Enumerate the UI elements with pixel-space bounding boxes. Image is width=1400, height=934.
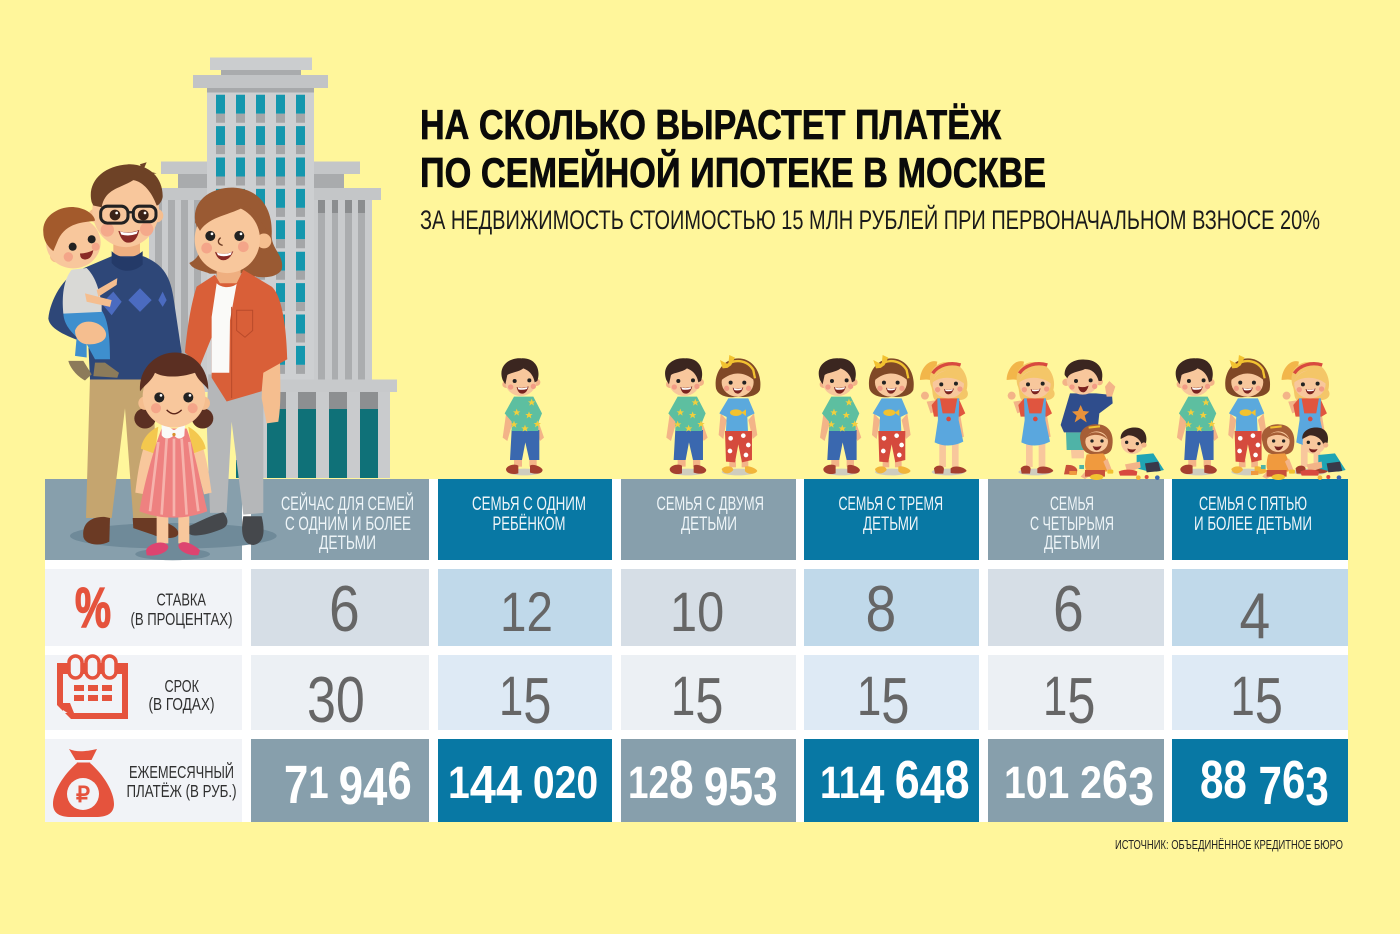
cell payment 128 953: 128 <box>628 750 694 810</box>
illustration: two children <box>665 355 760 475</box>
header: one child: РЕБЁНКОМ <box>492 514 566 535</box>
illustration: four children <box>1007 359 1164 480</box>
row: term <box>45 655 1348 737</box>
cell payment 71 946 <box>251 739 429 822</box>
cell payment 101 263 <box>988 739 1164 822</box>
small boy in arms <box>43 207 119 381</box>
cell term 15: 5 <box>881 665 909 737</box>
header: empty corner <box>45 479 242 560</box>
cell term 15: 1 <box>499 665 523 727</box>
row: rate <box>45 569 1348 652</box>
illustration: one child <box>501 358 544 475</box>
cell payment 114 648: 4 <box>859 754 885 815</box>
cell rate 12: 12 <box>500 581 553 644</box>
woman <box>185 188 287 545</box>
cell payment 71 946: 9 <box>339 757 363 816</box>
header: one child <box>438 479 612 560</box>
row label: term: (В ГОДАХ) <box>148 694 214 714</box>
cell rate 12 <box>438 569 612 646</box>
cell term 15 <box>804 655 979 737</box>
cell payment 144 020: 44 <box>470 754 522 815</box>
cell payment 114 648: 11 <box>820 758 859 808</box>
cell term 15 <box>988 655 1164 737</box>
header: five or more children <box>1172 479 1348 560</box>
illustration: five or more children <box>1176 355 1346 480</box>
icon: building <box>140 58 397 478</box>
row label: term: СРОК <box>164 676 200 696</box>
cell term 15: 1 <box>1043 665 1067 727</box>
man <box>48 162 182 544</box>
cell term 15: 5 <box>695 665 723 737</box>
header: current families: С ОДНИМ И БОЛЕЕ <box>285 514 411 535</box>
header: three children: ДЕТЬМИ <box>863 514 918 535</box>
cell term 15: 1 <box>857 665 881 727</box>
row label: rate: (В ПРОЦЕНТАХ) <box>130 609 232 629</box>
little girl <box>134 352 213 556</box>
cell payment 144 020: 020 <box>522 757 598 808</box>
cell term 30: 30 <box>307 665 365 736</box>
cell payment 101 263: 101 26 <box>1004 749 1128 810</box>
cell term 15: 1 <box>1230 665 1255 727</box>
title: НА СКОЛЬКО ВЫРАСТЕТ ПЛАТЁЖ <box>420 101 1001 148</box>
cell payment 144 020: 1 <box>448 757 470 808</box>
cell rate 6: 6 <box>329 572 360 645</box>
cell payment 71 946: 7 <box>284 756 308 815</box>
cell payment 71 946: 6 <box>387 752 412 811</box>
cell payment 128 953: 953 <box>704 757 778 817</box>
cell payment 114 648 <box>804 739 979 822</box>
cell payment 88 763 <box>1172 739 1348 822</box>
row label: rate: СТАВКА <box>156 590 206 610</box>
cell payment 71 946: 1 <box>308 757 339 808</box>
header: two children <box>621 479 796 560</box>
header: two children: СЕМЬЯ С ДВУМЯ <box>656 494 764 515</box>
cell term 15 <box>621 655 796 737</box>
cell rate 6: 6 <box>1053 572 1084 645</box>
cell rate 8: 8 <box>866 572 896 645</box>
header: three children: СЕМЬЯ С ТРЕМЯ <box>838 494 943 515</box>
icon: percent: % <box>75 576 111 640</box>
cell rate 8 <box>804 569 979 646</box>
cell term 15 <box>1172 655 1348 737</box>
title: ПО СЕМЕЙНОЙ ИПОТЕКЕ В МОСКВЕ <box>420 149 1046 196</box>
shadows <box>70 523 277 560</box>
header: current families: ДЕТЬМИ <box>319 533 376 554</box>
header: five or more children: СЕМЬЯ С ПЯТЬЮ <box>1199 494 1307 515</box>
cell rate 4 <box>1172 569 1348 652</box>
header: three children <box>804 479 979 560</box>
cell payment 88 763: 6 <box>1282 750 1305 810</box>
cell payment 114 648: 6 <box>895 749 920 810</box>
cell payment 88 763: 7 <box>1259 756 1282 816</box>
header: four children: ДЕТЬМИ <box>1044 533 1100 554</box>
icon: money bag: ₽ <box>76 782 90 807</box>
cell rate 10: 10 <box>670 581 724 644</box>
header: one child: СЕМЬЯ С ОДНИМ <box>472 494 586 515</box>
cell term 15: 5 <box>1067 665 1095 737</box>
row: monthly payment <box>45 739 1348 822</box>
cell payment 114 648: 8 <box>945 749 970 810</box>
cell term 15 <box>438 655 612 737</box>
cell rate 10 <box>621 569 796 646</box>
cell payment 144 020 <box>438 739 612 822</box>
cell payment 114 648: 4 <box>920 754 945 815</box>
illustration: family <box>43 162 287 560</box>
cell term 15: 5 <box>523 665 551 737</box>
row label: payment: ЕЖЕМЕСЯЧНЫЙ <box>129 761 234 782</box>
icon: money bag <box>53 749 114 817</box>
cell payment 88 763: 88 <box>1200 750 1247 810</box>
row label: rate <box>45 569 242 646</box>
icon: calendar <box>57 656 128 719</box>
row label: payment <box>45 739 242 822</box>
header: four children <box>988 479 1164 560</box>
header: four children: СЕМЬЯ <box>1050 494 1094 515</box>
cell term 15: 5 <box>1255 665 1283 737</box>
illustration: three children <box>819 355 968 475</box>
cell rate 4: 4 <box>1240 579 1270 652</box>
row label: payment: ПЛАТЁЖ (В РУБ.) <box>126 781 236 801</box>
row label: term <box>45 655 242 730</box>
cell payment 101 263: 3 <box>1128 756 1154 817</box>
title <box>420 101 1046 196</box>
hoodie boy <box>1061 359 1115 474</box>
cell payment 71 946: 4 <box>363 758 388 817</box>
header: five or more children: И БОЛЕЕ ДЕТЬМИ <box>1194 514 1312 535</box>
cell term 15: 1 <box>671 665 695 727</box>
header: current families: СЕЙЧАС ДЛЯ СЕМЕЙ <box>281 493 414 515</box>
panel: header row <box>45 479 1348 560</box>
header: two children: ДЕТЬМИ <box>681 514 737 535</box>
header: current families <box>251 479 429 560</box>
table background <box>45 479 1348 822</box>
cell rate 6 <box>988 569 1164 646</box>
cell payment 88 763: 3 <box>1305 757 1329 817</box>
cell term 30 <box>251 655 429 736</box>
cell payment 128 953 <box>621 739 796 822</box>
cell rate 6 <box>251 569 429 646</box>
header: four children: С ЧЕТЫРЬМЯ <box>1030 514 1114 535</box>
